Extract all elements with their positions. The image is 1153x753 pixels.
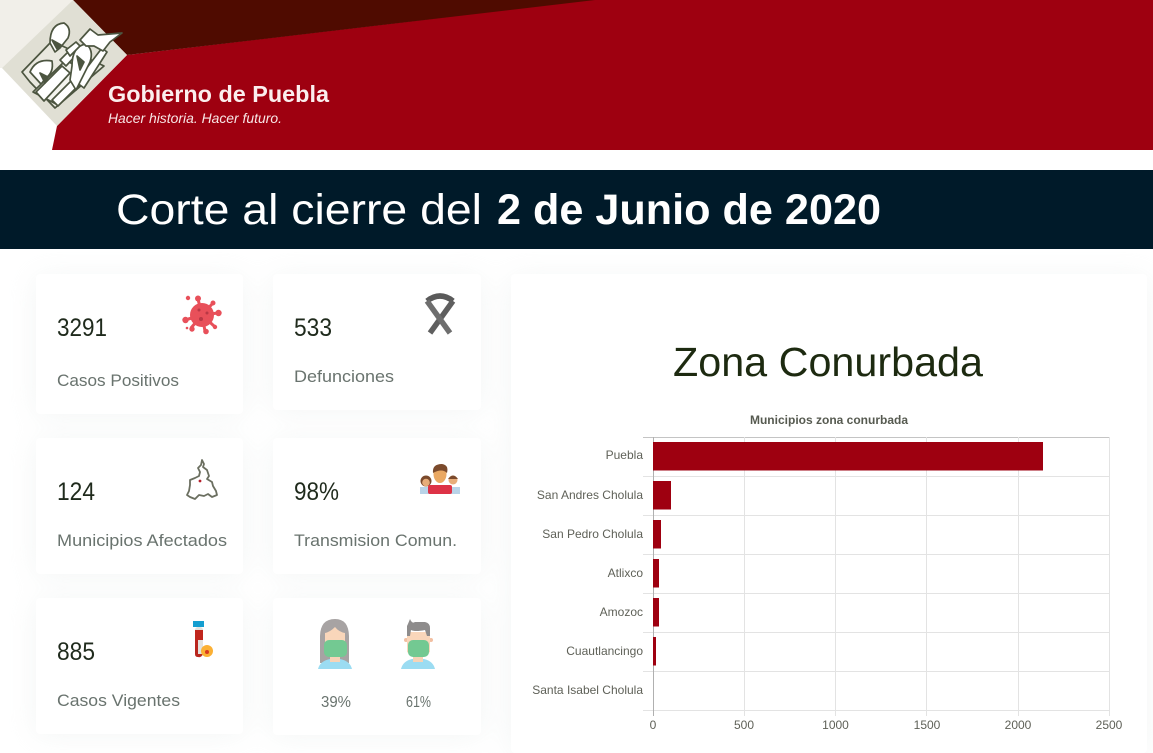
card shadows <box>36 278 1147 753</box>
value axis labels: 1000 <box>822 718 849 732</box>
label: defunciones: Defunciones <box>294 367 394 386</box>
icon: mourning ribbon <box>427 296 453 333</box>
date heading: 2 de Junio de 2020 <box>497 186 881 234</box>
card: casos vigentes <box>36 598 243 734</box>
icon: woman with mask <box>318 619 352 669</box>
value: defunciones: 533 <box>294 314 332 342</box>
value: casos vigentes: 885 <box>57 638 95 666</box>
bars <box>653 442 1043 666</box>
card: casos positivos <box>36 274 243 414</box>
category labels: Amozoc <box>600 605 643 619</box>
value: hombres: 61% <box>406 694 431 711</box>
icon: Puebla state map <box>187 460 217 499</box>
brand name: Gobierno de Puebla <box>108 81 329 107</box>
value: transmision: 98% <box>294 478 339 506</box>
value: casos positivos: 3291 <box>57 314 107 342</box>
panel: zona conurbada <box>511 274 1147 753</box>
value axis labels <box>650 718 1123 732</box>
card: defunciones <box>273 274 481 410</box>
value: municipios afectados: 124 <box>57 478 95 506</box>
card: municipios afectados <box>36 438 243 574</box>
icon: family group <box>420 464 460 494</box>
category labels: Puebla <box>606 448 643 462</box>
value: mujeres: 39% <box>321 694 351 711</box>
value axis labels: 2500 <box>1096 718 1123 732</box>
icon: virus <box>182 296 222 334</box>
icon: blood test tube <box>193 621 213 657</box>
category labels: Cuautlancingo <box>566 644 643 658</box>
icon: government logo <box>22 23 122 108</box>
label: transmision: Transmision Comun. <box>294 531 457 550</box>
category labels: San Andres Cholula <box>537 488 643 502</box>
value axis labels: 1500 <box>914 718 941 732</box>
tagline: Hacer historia. Hacer futuro. <box>108 110 282 126</box>
category labels: Santa Isabel Cholula <box>532 683 643 697</box>
date band <box>0 170 1153 249</box>
card: transmision comunitaria <box>273 438 481 574</box>
header banner <box>0 0 1153 150</box>
icon: man with mask <box>401 619 435 669</box>
category labels <box>532 448 643 697</box>
date heading <box>116 186 881 234</box>
chart title: Municipios zona conurbada <box>750 413 908 427</box>
label: casos vigentes: Casos Vigentes <box>57 691 180 710</box>
value axis labels: 0 <box>650 718 657 732</box>
category labels: Atlixco <box>608 566 643 580</box>
panel heading: Zona Conurbada <box>673 339 983 385</box>
date heading: Corte al cierre del <box>116 186 482 234</box>
label: casos positivos: Casos Positivos <box>57 371 179 390</box>
bar chart <box>532 413 1123 732</box>
label: municipios afectados: Municipios Afectados <box>57 531 227 550</box>
value axis labels: 2000 <box>1005 718 1032 732</box>
value axis labels: 500 <box>734 718 754 732</box>
category labels: San Pedro Cholula <box>542 527 643 541</box>
card: sexo <box>273 598 481 735</box>
